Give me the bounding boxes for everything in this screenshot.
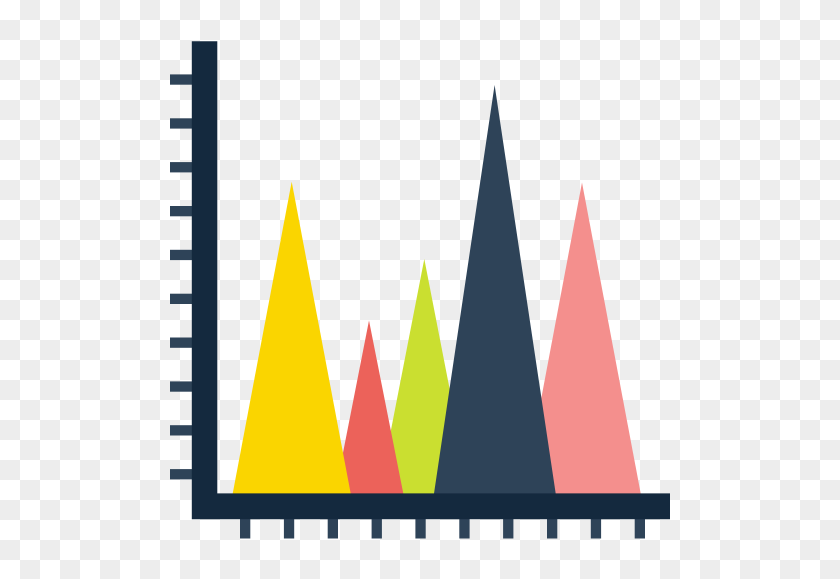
chart axes — [192, 41, 670, 519]
triangle: yellow — [233, 182, 351, 493]
y-axis tick marks — [170, 74, 192, 479]
triangles — [233, 85, 641, 494]
triangle: pink — [523, 182, 641, 494]
triangle: lime green — [379, 259, 470, 494]
x-axis tick marks — [240, 519, 645, 538]
triangle: coral red — [335, 320, 403, 494]
triangle: dark blue — [434, 85, 556, 494]
